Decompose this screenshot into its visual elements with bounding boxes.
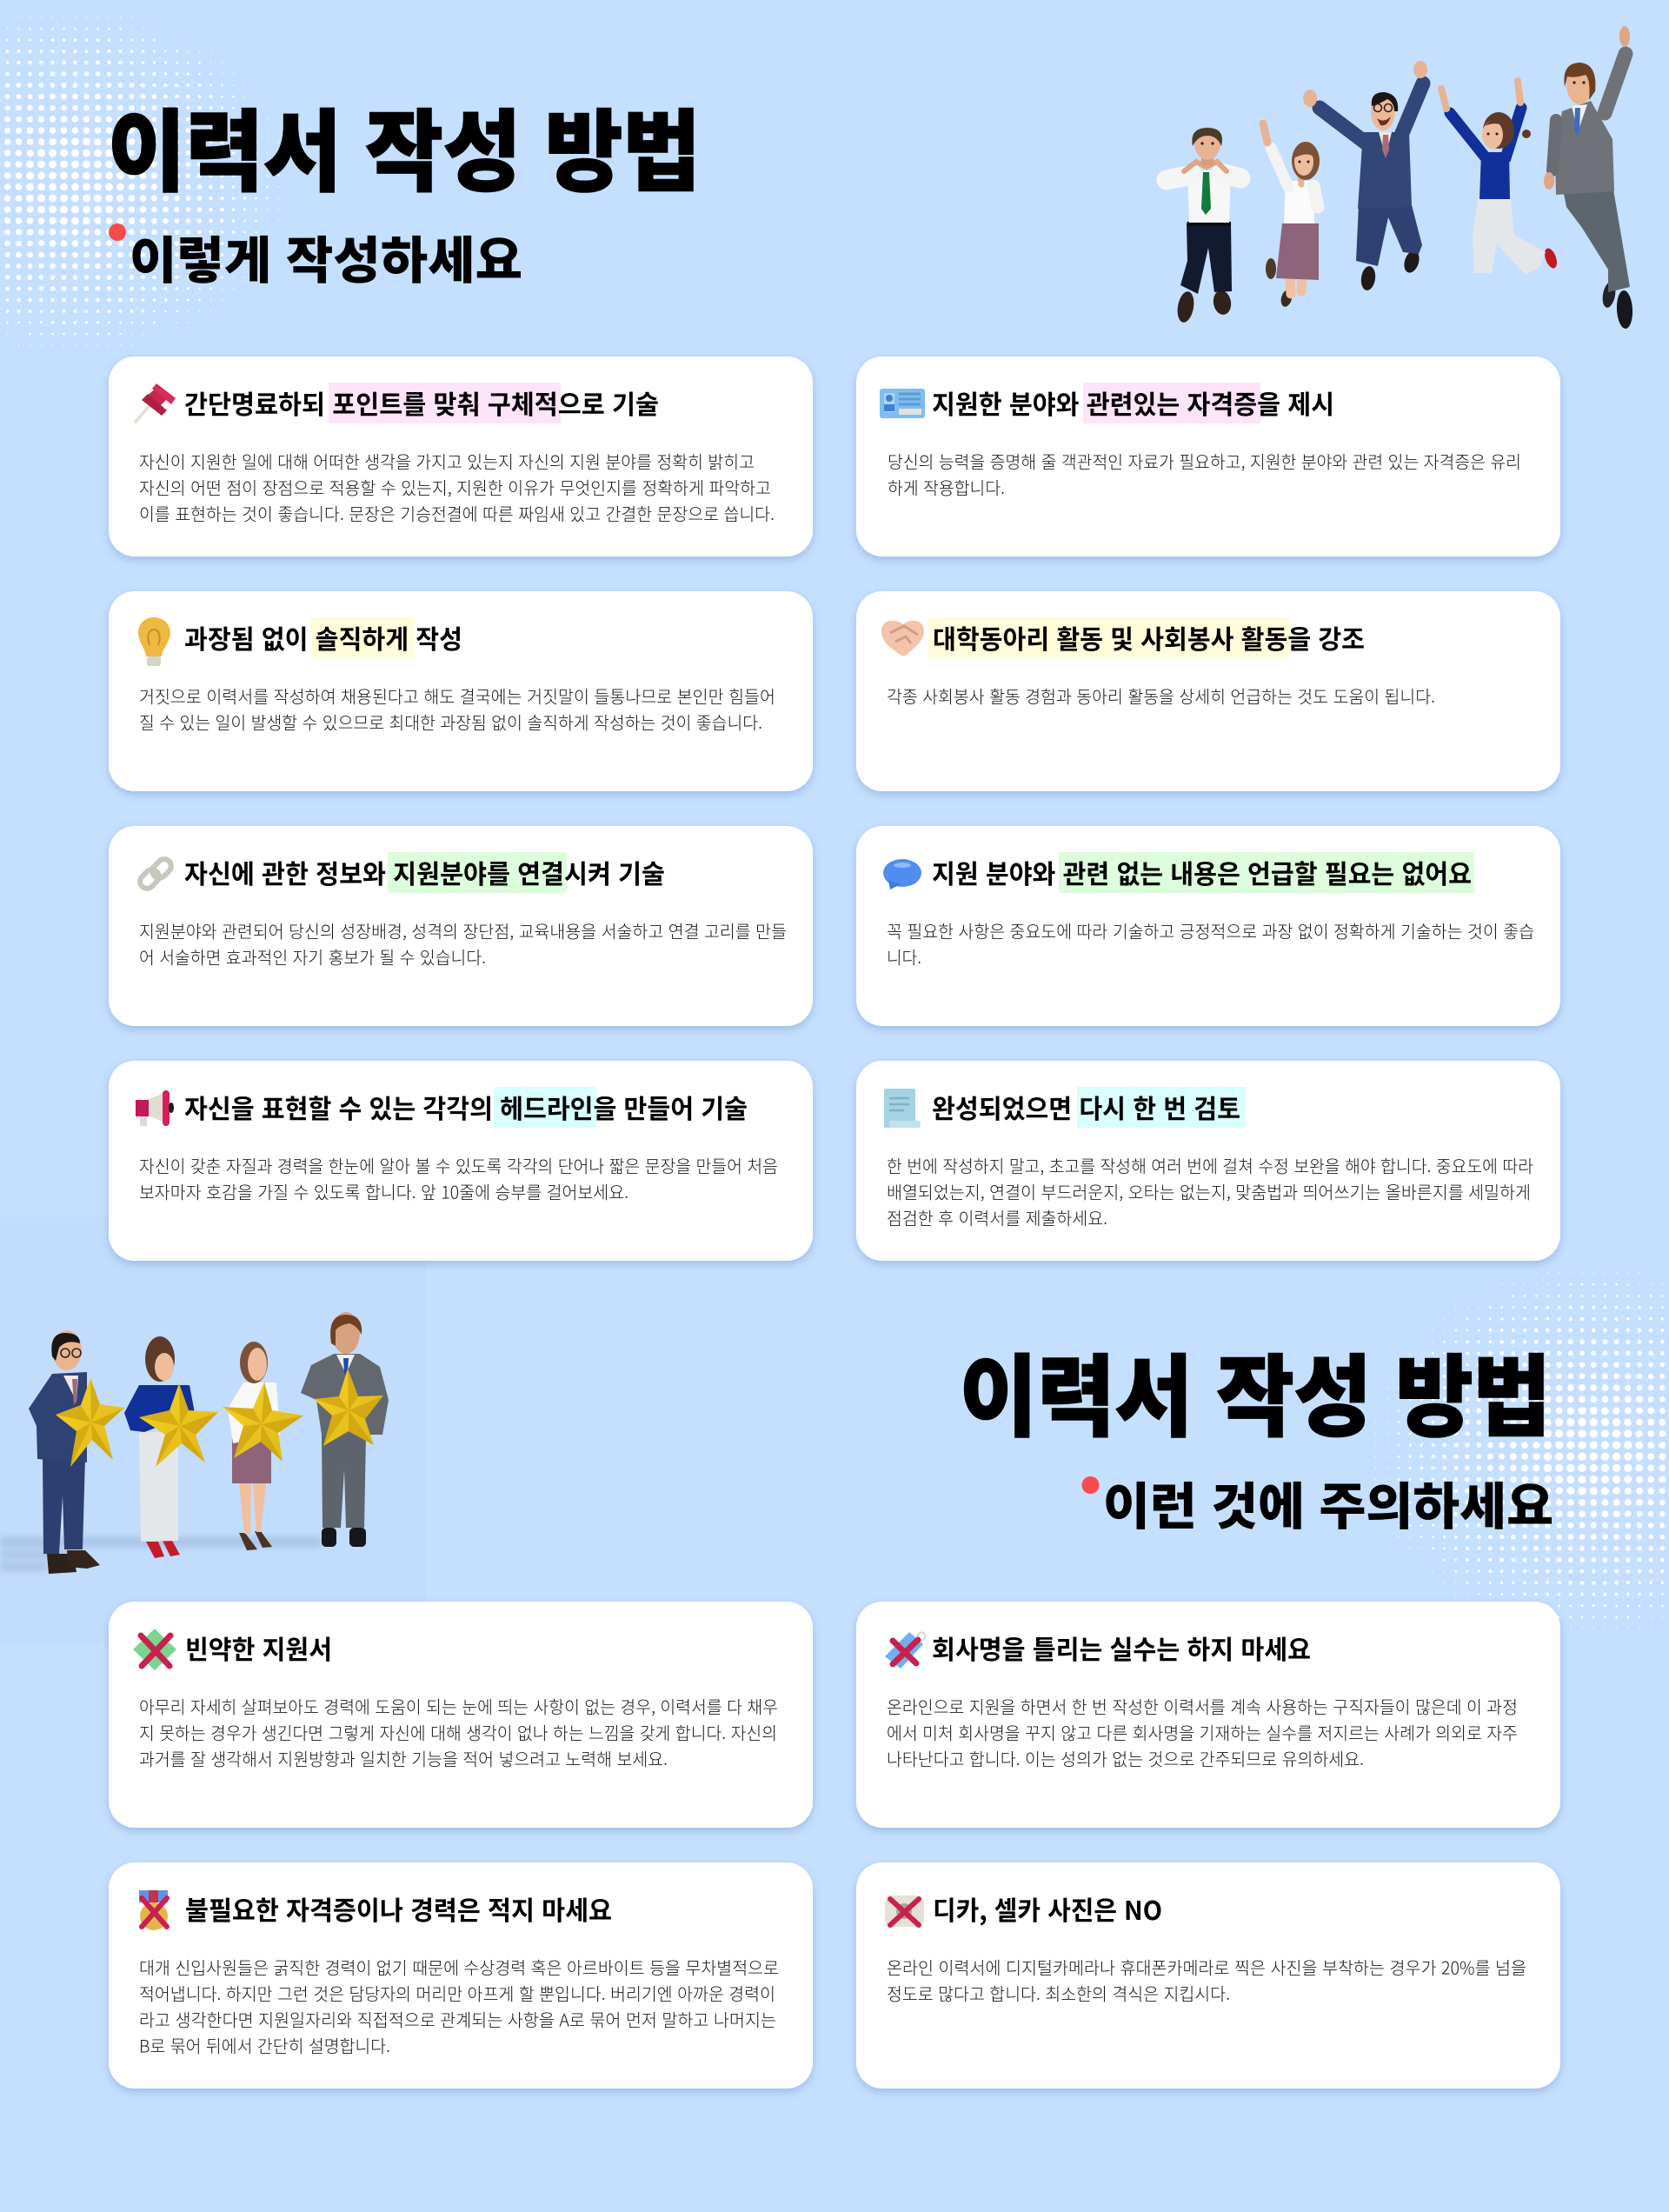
body text: 온라인 이력서에 디지털카메라나 휴대폰카메라로 찍은 사진을 부착하는 경우가 20%를 넘을 [887, 1955, 1526, 1979]
icon: pushpin [136, 383, 176, 422]
icon: chain link [137, 856, 174, 891]
star [314, 1369, 383, 1446]
body text: 보자마자 호감을 가질 수 있도록 합니다. 앞 10줄에 승부를 걸어보세요. [139, 1179, 628, 1203]
body text: 정도로 많다고 합니다. 최소한의 격식은 지킵시다. [887, 1981, 1230, 2005]
panel: card 8 [856, 1061, 1560, 1261]
icon: crossed out medal [139, 1890, 168, 1930]
heading: 간단명료하되 포인트를 맞춰 구체적으로 기술 [184, 383, 659, 422]
icon: crossed out camera [885, 1896, 924, 1927]
highlight [1083, 383, 1260, 423]
heading: 회사명을 틀리는 실수는 하지 마세요 [932, 1629, 1311, 1667]
body text: B로 묶어 뒤에서 간단히 설명합니다. [139, 2033, 390, 2057]
halftone dots: lower right [1372, 1266, 1669, 1638]
icon: speech bubble [883, 859, 921, 889]
body text: 나타난다고 합니다. 이는 성의가 없는 것으로 간주되므로 유의하세요. [887, 1746, 1364, 1770]
panel: card 10 [856, 1602, 1560, 1828]
body text: 아무리 자세히 살펴보아도 경력에 도움이 되는 눈에 띄는 사항이 없는 경우, 이력서를 다 채우 [139, 1694, 778, 1718]
icon: crossed out diamonds [133, 1629, 176, 1670]
body text: 자신이 갖춘 자질과 경력을 한눈에 알아 볼 수 있도록 각각의 단어나 짧은 문장을 만들어 처음 [139, 1153, 778, 1177]
heading: 자신에 관한 정보와 지원분야를 연결시켜 기술 [184, 853, 665, 891]
body text: 대개 신입사원들은 굵직한 경력이 없기 때문에 수상경력 혹은 아르바이트 등을 무차별적으로 [139, 1955, 779, 1979]
illustration: four workers holding gold stars [0, 1312, 389, 1574]
body text: 자신의 어떤 점이 장점으로 적용할 수 있는지, 지원한 이유가 무엇인지를 정확하게 파악하고 [139, 475, 771, 499]
body text: 온라인으로 지원을 하면서 한 번 작성한 이력서를 계속 사용하는 구직자들이 많은데 이 과정 [887, 1694, 1518, 1718]
body text [139, 918, 787, 969]
figure: man with green tie [1167, 127, 1240, 323]
panel: card 1 [109, 356, 813, 556]
figure: woman in blue top with star [124, 1336, 218, 1558]
panel: card 9 [109, 1602, 813, 1828]
illustration: five jumping office workers [1167, 26, 1633, 329]
subtitle: top: 이렇게 작성하세요 [130, 220, 522, 293]
body text [139, 449, 775, 525]
highlight [388, 852, 567, 893]
figure: man in grey suit [1544, 26, 1633, 329]
figure: man in navy suit with star [29, 1330, 124, 1574]
body text: 각종 사회봉사 활동 경험과 동아리 활동을 상세히 언급하는 것도 도움이 됩니다. [887, 683, 1435, 708]
body text [887, 1955, 1526, 2005]
body text: 지원분야와 관련되어 당신의 성장배경, 성격의 장단점, 교육내용을 서술하고 연결 고리를 만들 [139, 918, 787, 943]
icon: light bulb [138, 617, 170, 666]
red dot: top subtitle [109, 223, 126, 241]
body text: 점검한 후 이력서를 제출하세요. [887, 1205, 1107, 1229]
highlight [494, 1087, 596, 1128]
heading: 과장됨 없이 솔직하게 작성 [184, 618, 462, 656]
panel: card 11 [109, 1862, 813, 2089]
highlight [1077, 1087, 1246, 1128]
panel: lower illustration backdrop [0, 1217, 426, 1643]
body text: 에서 미처 회사명을 꾸지 않고 다른 회사명을 기재하는 실수를 저지르는 사례가 의외로 자주 [887, 1720, 1518, 1744]
body text: 적어냅니다. 하지만 그런 것은 담당자의 머리만 아프게 할 뿐입니다. 버리기엔 아까운 경력이 [139, 1981, 775, 2005]
figure: woman in blue top and white pants [1441, 81, 1559, 275]
panel: card 6 [856, 826, 1560, 1026]
star [139, 1383, 218, 1467]
icon: megaphone [136, 1090, 174, 1126]
body text: 과거를 잘 생각해서 지원방향과 일치한 기능을 적어 넣으려고 노력해 보세요. [139, 1746, 668, 1770]
body text: 니다. [887, 944, 921, 969]
highlight [1059, 852, 1474, 893]
icon: ID card [880, 389, 925, 418]
icon: crossed out name tag [885, 1632, 925, 1669]
heading: 불필요한 자격증이나 경력은 적지 마세요 [185, 1889, 612, 1928]
halftone dots: top left [0, 9, 287, 353]
body text: 배열되었는지, 연결이 부드러운지, 오타는 없는지, 맞춤법과 띄어쓰기는 올바른지를 세밀하게 [887, 1179, 1531, 1203]
heading: 디카, 셀카 사진은 NO [933, 1889, 1162, 1928]
heading: 대학동아리 활동 및 사회봉사 활동을 강조 [933, 618, 1365, 656]
highlight [311, 617, 415, 658]
icon: scroll [884, 1089, 921, 1128]
icon: handshake [881, 621, 924, 656]
figure: man in grey suit with star [301, 1312, 389, 1547]
star [223, 1382, 303, 1462]
body text: 라고 생각한다면 지원일자리와 직접적으로 관계되는 사항을 A로 묶어 먼저 말하고 나머지는 [139, 2007, 776, 2031]
body text [139, 1694, 778, 1770]
body text [887, 918, 1534, 969]
body text: 어 서술하면 효과적인 자기 홍보가 될 수 있습니다. [139, 944, 486, 969]
body text [139, 683, 775, 734]
panel: card 2 [856, 356, 1560, 556]
figure: woman in white blouse with star [223, 1342, 303, 1550]
heading: 빈약한 지원서 [185, 1629, 332, 1667]
subtitle: lower: 이런 것에 주의하세요 [1103, 1466, 1553, 1539]
body text: 지 못하는 경우가 생긴다면 그렇게 자신에 대해 생각이 없나 하는 느낌을 갖게 합니다. 자신의 [139, 1720, 777, 1744]
body text [139, 1955, 779, 2057]
body text: 질 수 있는 일이 발생할 수 있으므로 최대한 과장됨 없이 솔직하게 작성하는 것이 좋습니다. [139, 710, 762, 734]
heading: 자신을 표현할 수 있는 각각의 헤드라인을 만들어 기술 [184, 1088, 748, 1126]
body text [888, 449, 1521, 499]
body text: 한 번에 작성하지 말고, 초고를 작성해 여러 번에 걸쳐 수정 보완을 해야 합니다. 중요도에 따라 [887, 1153, 1533, 1177]
star [56, 1378, 124, 1467]
heading: 완성되었으면 다시 한 번 검토 [932, 1088, 1240, 1126]
body text: 이를 표현하는 것이 좋습니다. 문장은 기승전결에 따른 짜임새 있고 간결한 문장으로 씁니다. [139, 501, 775, 525]
heading: 지원한 분야와 관련있는 자격증을 제시 [932, 383, 1334, 422]
title: lower: 이력서 작성 방법 [960, 1327, 1551, 1455]
body text: 당신의 능력을 증명해 줄 객관적인 자료가 필요하고, 지원한 분야와 관련 있는 자격증은 유리 [888, 449, 1521, 473]
red dot: lower subtitle [1081, 1476, 1099, 1494]
panel: card 3 [109, 591, 813, 791]
body text [887, 1694, 1518, 1770]
heading: 지원 분야와 관련 없는 내용은 언급할 필요는 없어요 [932, 853, 1472, 891]
floor shadows [0, 1537, 322, 1570]
body text: 꼭 필요한 사항은 중요도에 따라 기술하고 긍정적으로 과장 없이 정확하게 기술하는 것이 좋습 [887, 918, 1534, 943]
panel: card 4 [856, 591, 1560, 791]
highlight [329, 383, 561, 423]
figure: woman with mauve skirt [1263, 123, 1320, 308]
figure: man in navy suit with glasses [1303, 61, 1427, 291]
body text: 하게 작용합니다. [888, 475, 1005, 499]
body text [887, 1153, 1533, 1229]
highlight [928, 617, 1289, 658]
body text: 거짓으로 이력서를 작성하여 채용된다고 해도 결국에는 거짓말이 들통나므로 본인만 힘들어 [139, 683, 775, 708]
body text: 자신이 지원한 일에 대해 어떠한 생각을 가지고 있는지 자신의 지원 분야를 정확히 밝히고 [139, 449, 755, 473]
title: top: 이력서 작성 방법 [108, 82, 701, 210]
panel: card 12 [856, 1862, 1560, 2089]
panel: card 5 [109, 826, 813, 1026]
panel: card 7 [109, 1061, 813, 1261]
body text [139, 1153, 778, 1203]
